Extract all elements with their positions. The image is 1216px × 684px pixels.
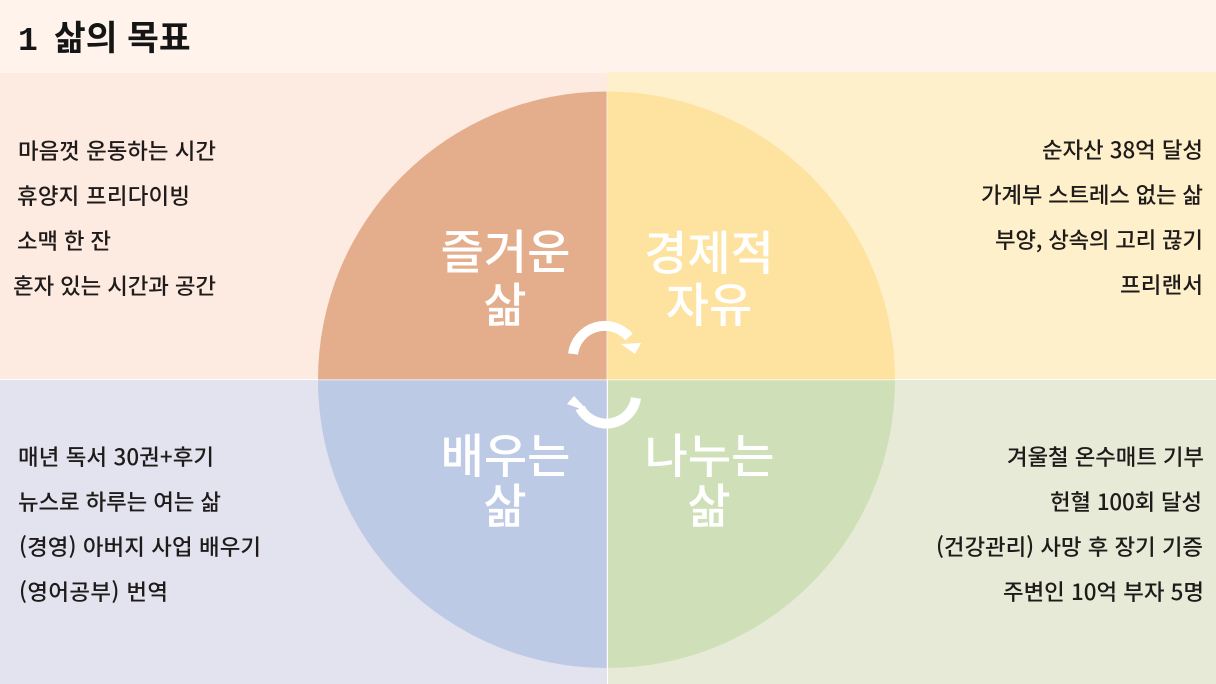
text block: 나누는 삶 목록: 헌혈 100회 달성: [1050, 485, 1202, 517]
title: 1: [18, 23, 38, 60]
panel: top-right background: [607, 72, 1216, 379]
label: 나누는 삶: 나누는: [645, 418, 774, 487]
arrow: clockwise bottom: [567, 396, 636, 424]
text block: 경제적 자유 목록: 프리랜서: [1120, 268, 1203, 300]
text block: 나누는 삶 목록: [936, 440, 1204, 607]
label: 나누는 삶: 삶: [687, 468, 731, 537]
label: 경제적 자유: 자유: [666, 267, 752, 336]
text block: 배우는 삶 목록: 매년 독서 30권+후기: [18, 440, 214, 472]
text block: 배우는 삶 목록: [18, 440, 261, 607]
label: 즐거운 삶: [441, 214, 570, 336]
label: 배우는 삶: 삶: [483, 468, 527, 537]
text block: 배우는 삶 목록: 뉴스로 하루는 여는 삶: [18, 485, 221, 517]
text block: 경제적 자유 목록: 부양, 상속의 고리 끊기: [995, 223, 1203, 255]
label: 배우는 삶: [441, 418, 570, 537]
text block: 배우는 삶 목록: (영어공부) 번역: [19, 575, 168, 607]
text block: 경제적 자유 목록: 가계부 스트레스 없는 삶: [981, 178, 1203, 210]
text block: 배우는 삶 목록: (경영) 아버지 사업 배우기: [19, 530, 261, 562]
text block: 나누는 삶 목록: (건강관리) 사망 후 장기 기증: [936, 530, 1203, 562]
text block: 나누는 삶 목록: 겨울철 온수매트 기부: [1007, 440, 1204, 472]
label: 배우는 삶: 배우는: [441, 418, 570, 487]
text block: 즐거운 삶 목록: 마음껏 운동하는 시간: [18, 134, 216, 166]
text block: 나누는 삶 목록: 주변인 10억 부자 5명: [1003, 575, 1204, 607]
panel: top-left background: [0, 73, 607, 379]
label: 즐거운 삶: 삶: [483, 267, 527, 336]
label: 즐거운 삶: 즐거운: [441, 214, 570, 283]
title: 삶의 목표: [54, 10, 191, 60]
panel: bottom-left background: [0, 380, 607, 684]
text block: 즐거운 삶 목록: [13, 134, 216, 301]
text block: 경제적 자유 목록: [981, 133, 1203, 300]
text block: 경제적 자유 목록: 순자산 38억 달성: [1042, 133, 1203, 165]
label: 경제적 자유: [644, 215, 774, 336]
label: 경제적 자유: 경제적: [644, 215, 774, 284]
arrow: clockwise top: [573, 326, 641, 354]
circle quadrant: 배우는 삶: [318, 380, 606, 668]
panel: bottom-right background: [608, 380, 1216, 684]
label: 나누는 삶: [645, 418, 774, 537]
circle quadrant: 경제적 자유: [608, 92, 895, 380]
text block: 즐거운 삶 목록: 혼자 있는 시간과 공간: [13, 269, 216, 301]
text block: 즐거운 삶 목록: 소맥 한 잔: [17, 224, 111, 256]
circle quadrant: 나누는 삶: [608, 380, 895, 668]
header band: [0, 0, 1216, 74]
text block: 즐거운 삶 목록: 휴양지 프리다이빙: [17, 179, 190, 211]
circle quadrant: 즐거운 삶: [318, 92, 606, 380]
